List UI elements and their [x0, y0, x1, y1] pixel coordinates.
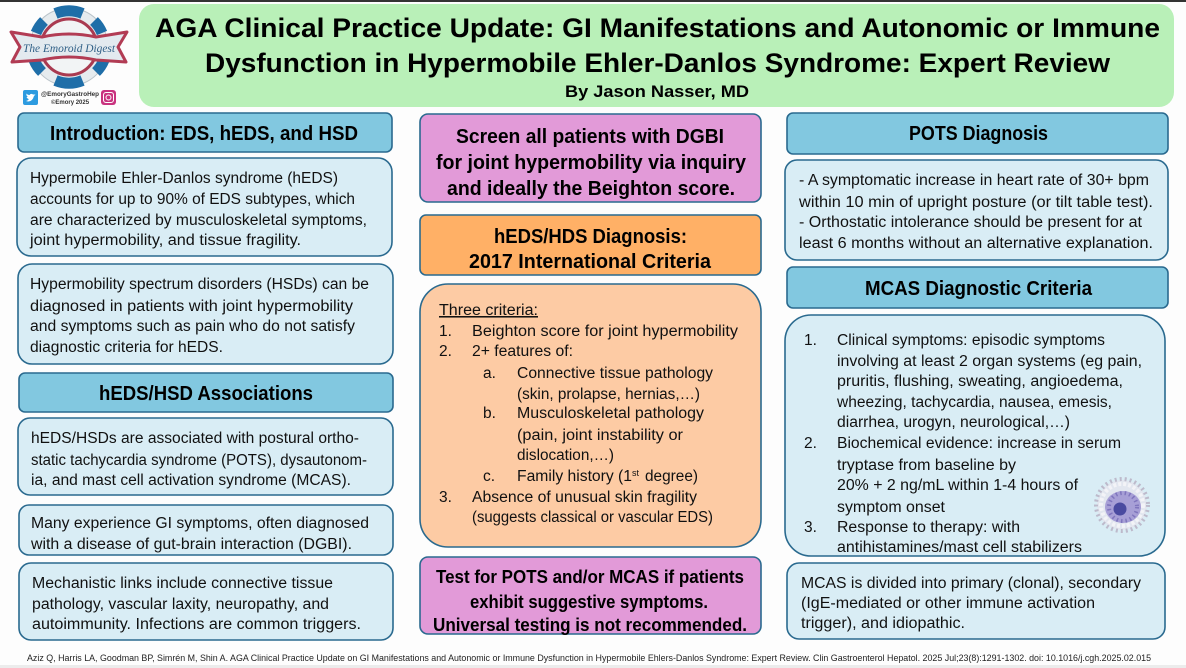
heading: hEDS/HDS Diagnosis: 2017 International Criteria: [469, 251, 712, 273]
panel: HSD definition: diagnostic criteria for hEDS.: [30, 339, 223, 356]
panel: hEDS definition: [17, 158, 392, 256]
icon: mast cell: [1096, 479, 1148, 531]
panel: mechanistic links: pathology, vascular laxity, neuropathy, and: [32, 596, 329, 613]
panel: GI symptoms: Many experience GI symptoms, often diagnosed: [31, 515, 369, 532]
panel: mechanistic links: autoimmunity. Infections are common triggers.: [32, 616, 361, 633]
callout: test for POTS and MCAS: [420, 557, 761, 635]
panel: three criteria: 1.: [439, 323, 452, 340]
panel: three criteria: c.: [483, 468, 495, 485]
panel: HSD definition: [18, 264, 393, 364]
panel: MCAS criteria: Response to therapy: with: [837, 519, 1020, 536]
panel: MCAS criteria: 3.: [804, 519, 817, 536]
panel: MCAS criteria: diarrhea, urogyn, neurological,…): [837, 414, 1070, 431]
panel: MCAS criteria: wheezing, tachycardia, nausea, emesis,: [836, 394, 1112, 411]
callout: test for POTS and MCAS: Universal testing is not recommended.: [433, 615, 747, 635]
panel: three criteria: Musculoskeletal pathology: [517, 405, 704, 422]
panel: mechanistic links: Mechanistic links include connective tissue: [32, 575, 333, 592]
panel: MCAS criteria: 2.: [804, 435, 817, 452]
callout: test for POTS and MCAS: exhibit suggestive symptoms.: [470, 592, 708, 612]
heading: MCAS Diagnostic Criteria: [787, 267, 1168, 308]
logo: The Emoroid Digest: ©Emory 2025: [51, 99, 90, 106]
callout: screen all patients: and ideally the Beighton score.: [447, 178, 735, 200]
panel: POTS criteria: - A symptomatic increase in heart rate of 30+ bpm: [799, 172, 1149, 189]
heading: hEDS/HSD Associations: hEDS/HSD Associations: [99, 383, 313, 405]
panel: associations: ia, and mast cell activation syndrome (MCAS).: [31, 472, 351, 489]
panel: POTS criteria: within 10 min of upright posture (or tilt table test).: [798, 194, 1153, 211]
panel: POTS criteria: [785, 160, 1168, 260]
panel: MCAS criteria: symptom onset: [837, 499, 946, 516]
panel: three criteria: a.: [483, 365, 496, 382]
panel: GI symptoms: [19, 505, 393, 555]
heading: hEDS/HSD Associations: [19, 373, 393, 412]
panel: three criteria: 3.: [439, 489, 452, 506]
panel: three criteria: Three criteria:: [439, 302, 538, 319]
panel: MCAS criteria: 1.: [804, 332, 817, 349]
panel: POTS criteria: least 6 months without an alternative explanation.: [799, 235, 1153, 252]
panel: three criteria: (suggests classical or vascular EDS): [472, 509, 713, 526]
title banner: [139, 4, 1174, 107]
panel: MCAS criteria: tryptase from baseline by: [837, 457, 1016, 474]
heading: hEDS/HDS Diagnosis: hEDS/HDS Diagnosis:: [494, 226, 687, 248]
panel: associations: hEDS/HSDs are associated with postural ortho-: [31, 430, 359, 447]
panel: three criteria: 2.: [439, 343, 452, 360]
panel: three criteria: 2+ features of:: [472, 343, 573, 360]
panel: MCAS classification: [787, 563, 1165, 639]
panel: three criteria: [420, 284, 761, 547]
panel: mechanistic links: [19, 563, 393, 640]
panel: HSD definition: diagnosed in patients with joint hypermobility: [30, 298, 353, 315]
panel: three criteria: Absence of unusual skin fragility: [472, 489, 697, 506]
callout: test for POTS and MCAS: Test for POTS and/or MCAS if patients: [436, 567, 744, 587]
panel: three criteria: st: [632, 468, 640, 478]
panel: HSD definition: and symptoms such as pain who do not satisfy: [30, 318, 355, 335]
panel: hEDS definition: accounts for up to 90% of EDS subtypes, which: [30, 191, 355, 208]
heading: hEDS/HDS Diagnosis: [420, 215, 761, 275]
panel: three criteria: (skin, prolapse, hernias,…): [517, 386, 700, 403]
panel: three criteria: Connective tissue pathology: [517, 365, 713, 382]
panel: MCAS classification: (IgE-mediated or other immune activation: [801, 595, 1095, 612]
panel: POTS criteria: - Orthostatic intolerance should be present for at: [799, 214, 1143, 231]
panel: MCAS classification: trigger), and idiopathic.: [801, 615, 965, 632]
callout: screen all patients: Screen all patients with DGBI: [456, 126, 724, 148]
panel: MCAS criteria: 20% + 2 ng/mL within 1-4 hours of: [837, 477, 1079, 494]
heading: POTS Diagnosis: [787, 113, 1168, 154]
panel: three criteria: degree): [645, 468, 698, 485]
heading: Introduction: Introduction: EDS, hEDS, and HSD: [50, 123, 358, 145]
panel: MCAS classification: MCAS is divided into primary (clonal), secondary: [801, 575, 1141, 592]
panel: three criteria: b.: [483, 405, 496, 422]
panel: hEDS definition: Hypermobile Ehler-Danlos syndrome (hEDS): [30, 170, 338, 187]
panel: three criteria: dislocation,…): [517, 447, 614, 464]
heading: POTS Diagnosis: POTS Diagnosis: [909, 123, 1048, 145]
title: [155, 13, 1160, 78]
panel: three criteria: Beighton score for joint hypermobility: [472, 323, 738, 340]
panel: MCAS criteria: [785, 315, 1165, 556]
byline: By Jason Nasser, MD: [565, 82, 749, 101]
panel: MCAS criteria: involving at least 2 organ systems (eg pain,: [837, 353, 1142, 370]
panel: hEDS definition: joint hypermobility, and tissue fragility.: [29, 232, 301, 249]
heading: MCAS Diagnostic Criteria: MCAS Diagnostic Criteria: [865, 278, 1093, 300]
panel: MCAS criteria: Biochemical evidence: increase in serum: [837, 435, 1121, 452]
heading: Introduction: [18, 113, 392, 152]
panel: associations: [18, 418, 393, 495]
panel: three criteria: (pain, joint instability or: [517, 427, 683, 444]
panel: hEDS definition: are characterized by musculoskeletal symptoms,: [30, 212, 367, 229]
logo: The Emoroid Digest: The Emoroid Digest: [23, 41, 116, 55]
logo: The Emoroid Digest: [11, 8, 127, 106]
panel: GI symptoms: with a disease of gut-brain interaction (DGBI).: [30, 536, 352, 553]
callout: screen all patients: [420, 114, 761, 202]
panel: MCAS criteria: antihistamines/mast cell stabilizers: [837, 539, 1082, 556]
panel: MCAS criteria: pruritis, flushing, sweating, angioedema,: [837, 373, 1123, 390]
panel: associations: static tachycardia syndrome (POTS), dysautonom-: [31, 452, 367, 469]
title: Dysfunction in Hypermobile Ehler-Danlos Syndrome: Expert Review: [205, 48, 1111, 78]
panel: MCAS criteria: Clinical symptoms: episodic symptoms: [837, 332, 1105, 349]
title: AGA Clinical Practice Update: GI Manifestations and Autonomic or Immune: [155, 13, 1160, 43]
panel: HSD definition: Hypermobility spectrum disorders (HSDs) can be: [30, 276, 369, 293]
callout: screen all patients: for joint hypermobility via inquiry: [436, 152, 747, 174]
panel: three criteria: Family history (1: [517, 468, 632, 485]
logo: The Emoroid Digest: @EmoryGastroHep: [41, 92, 99, 98]
